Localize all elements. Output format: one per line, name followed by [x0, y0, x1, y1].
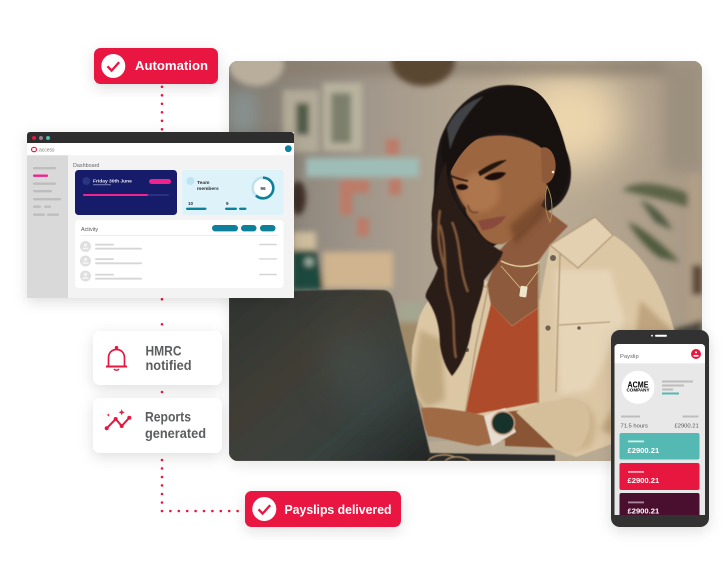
hours and pay summary: [620, 416, 698, 428]
ear and jewellery: [541, 147, 556, 183]
phone header: Payslip: [620, 354, 639, 360]
card: team members: members: [197, 186, 219, 192]
hands and watch: [421, 400, 590, 461]
dashboard header: [27, 143, 294, 155]
connector: dotted line Automation to dashboard: [161, 86, 163, 393]
table surface: [428, 442, 456, 453]
jacket shading: [412, 270, 674, 452]
dashboard sidebar: [27, 155, 68, 298]
card: team members: [182, 170, 284, 215]
front hair: [447, 86, 568, 174]
card: team members: Team: [197, 180, 210, 186]
badge: Payslips delivered: Payslips delivered: [284, 502, 392, 517]
dashboard title bar: [27, 132, 294, 143]
icon: trend line with sparkles: [105, 409, 131, 430]
card: HMRC notified: [93, 331, 222, 385]
phone: payslip app: [611, 330, 709, 527]
card: date and progress: [75, 170, 177, 215]
face: [448, 135, 547, 244]
phone header: [614, 344, 705, 363]
laptop: [229, 290, 432, 461]
connector: dotted line Reports to Payslips delivered: [161, 459, 239, 512]
dashboard header: access: [39, 147, 55, 153]
card: activity: Activity: [81, 227, 98, 233]
badge: Automation: Automation: [135, 58, 208, 73]
card: Reports generated: Reports: [145, 408, 191, 424]
card: HMRC notified: notified: [146, 357, 192, 373]
hours and pay summary: £2900.21: [675, 423, 699, 429]
card: Reports generated: [93, 398, 222, 453]
neck and chest: [487, 205, 568, 326]
pay card: red: [620, 463, 700, 490]
badge: Payslips delivered: [245, 491, 401, 527]
phone screen: [614, 344, 705, 520]
card: HMRC notified: HMRC: [146, 342, 182, 358]
card: date and progress: Friday 30th June: [93, 179, 132, 185]
company logo: ACME: [628, 380, 649, 390]
phone speaker: [651, 335, 667, 337]
pay card: maroon: [620, 493, 700, 515]
employee detail lines: [662, 380, 693, 394]
card: Reports generated: generated: [145, 425, 206, 441]
long wavy lock: [426, 160, 503, 376]
pay card: teal: £2900.21: [628, 446, 660, 455]
facial features: [451, 160, 507, 230]
card: team members: 9: [226, 201, 229, 206]
card: activity: [75, 220, 284, 288]
icon: bell: [106, 347, 127, 370]
blurred office background: [228, 34, 702, 461]
photo: woman working at a laptop: [228, 34, 702, 461]
dashboard heading: Dashboard: [73, 163, 99, 169]
company logo: [622, 371, 654, 404]
pay card: red: £2900.21: [628, 476, 660, 485]
rust top: [465, 304, 539, 416]
dashboard window: [27, 132, 294, 298]
jacket: [411, 217, 674, 457]
card: team members: 96: [260, 186, 266, 192]
hair back: [432, 85, 571, 262]
badge: Automation: [94, 48, 218, 84]
pay card: teal: [620, 433, 700, 460]
jacket collar and seams: [458, 217, 613, 415]
pay card: maroon: £2900.21: [628, 506, 660, 515]
company logo: COMPANY: [626, 388, 650, 392]
card: team members: 10: [188, 201, 194, 206]
hours and pay summary: 71.5 hours: [620, 423, 648, 429]
